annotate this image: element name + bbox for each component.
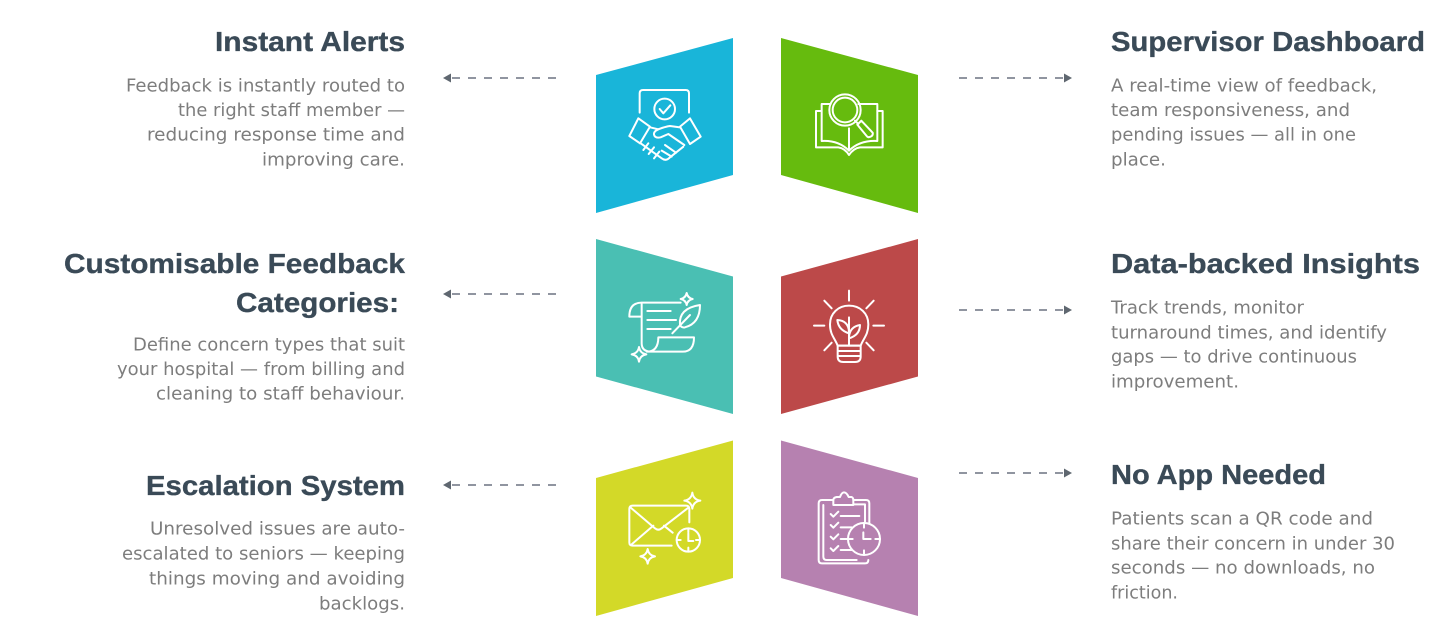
- heading: No App Needed: No App Needed: [1111, 459, 1326, 490]
- text block: Customisable Feedback description: Define concern types that suit: [133, 336, 405, 356]
- panel: Data-backed Insights text: [1110, 248, 1420, 392]
- text block: No App Needed description: seconds — no downloads, no: [1111, 558, 1375, 578]
- panel: red shape: [781, 239, 918, 414]
- text block: Escalation System description: Unresolved issues are auto-: [150, 520, 405, 540]
- text block: Instant Alerts description: the right staff member —: [178, 101, 405, 121]
- text block: No App Needed description: Patients scan a QR code and: [1111, 510, 1373, 530]
- icon: book with magnifying glass: [816, 94, 883, 155]
- text block: Supervisor Dashboard description: pending issues — all in one: [1111, 126, 1356, 146]
- text block: Instant Alerts description: [126, 76, 405, 170]
- heading: Escalation System: Escalation System: [146, 470, 405, 501]
- text block: Escalation System description: backlogs.: [319, 594, 405, 614]
- text block: Supervisor Dashboard description: A real-time view of feedback,: [1111, 76, 1377, 96]
- text block: Supervisor Dashboard description: place.: [1111, 150, 1166, 170]
- heading: Supervisor Dashboard: Supervisor Dashboard: [1111, 26, 1425, 57]
- panel: teal shape: [596, 239, 733, 414]
- panel: blue shape: [596, 38, 733, 213]
- text block: Customisable Feedback description: your hospital — from billing and: [117, 360, 405, 380]
- icon: envelope with clock: [629, 493, 700, 564]
- text block: No App Needed description: [1111, 510, 1395, 604]
- panel: Instant Alerts text: [126, 26, 405, 170]
- arrow: to Customisable Feedback Categories: [443, 290, 556, 298]
- text block: No App Needed description: friction.: [1111, 584, 1178, 604]
- panel: purple shape: [781, 440, 918, 616]
- text block: Data-backed Insights description: turnaround times, and identify: [1111, 324, 1387, 344]
- text block: Supervisor Dashboard description: team responsiveness, and: [1111, 101, 1350, 121]
- icon: scroll with quill: [629, 293, 700, 362]
- heading: Customisable Feedback Categories: Customisable Feedback: [64, 248, 405, 279]
- text block: Data-backed Insights description: Track trends, monitor: [1110, 298, 1305, 318]
- text block: Escalation System description: things moving and avoiding: [149, 570, 405, 590]
- text block: Customisable Feedback description: [117, 336, 405, 404]
- icon: handshake with check badge: [629, 90, 701, 160]
- icon: light bulb with plant: [814, 291, 884, 362]
- arrow: to Instant Alerts: [443, 74, 556, 82]
- heading: Instant Alerts: Instant Alerts: [215, 26, 405, 57]
- arrow: to Supervisor Dashboard: [959, 74, 1072, 82]
- arrow: to Data-backed Insights: [959, 306, 1072, 314]
- panel: green shape: [781, 38, 918, 213]
- text block: Data-backed Insights description: improvement.: [1111, 372, 1239, 392]
- text block: Escalation System description: [122, 520, 405, 614]
- panel: Customisable Feedback Categories text: [64, 248, 405, 404]
- text block: Instant Alerts description: improving care.: [262, 150, 405, 170]
- text block: Supervisor Dashboard description: [1111, 76, 1377, 170]
- heading: Data-backed Insights: Data-backed Insights: [1111, 248, 1420, 279]
- heading: Customisable Feedback Categories: [64, 248, 405, 318]
- panel: lime shape: [596, 440, 733, 616]
- heading: Customisable Feedback Categories: Categories:: [236, 287, 399, 318]
- text block: Instant Alerts description: reducing response time and: [147, 126, 405, 146]
- arrow: to No App Needed: [959, 468, 1072, 478]
- icon: clipboard with clock: [819, 492, 880, 563]
- panel: Escalation System text: [122, 470, 405, 614]
- text block: No App Needed description: share their concern in under 30: [1111, 534, 1395, 554]
- text block: Escalation System description: escalated to seniors — keeping: [122, 544, 405, 564]
- arrow: to Escalation System: [443, 480, 556, 490]
- text block: Instant Alerts description: Feedback is instantly routed to: [126, 76, 405, 96]
- text block: Customisable Feedback description: cleaning to staff behaviour.: [156, 384, 405, 404]
- text block: Data-backed Insights description: gaps — to drive continuous: [1111, 348, 1357, 368]
- text block: Data-backed Insights description: [1110, 298, 1387, 392]
- panel: No App Needed text: [1111, 459, 1395, 604]
- panel: Supervisor Dashboard text: [1111, 26, 1425, 170]
